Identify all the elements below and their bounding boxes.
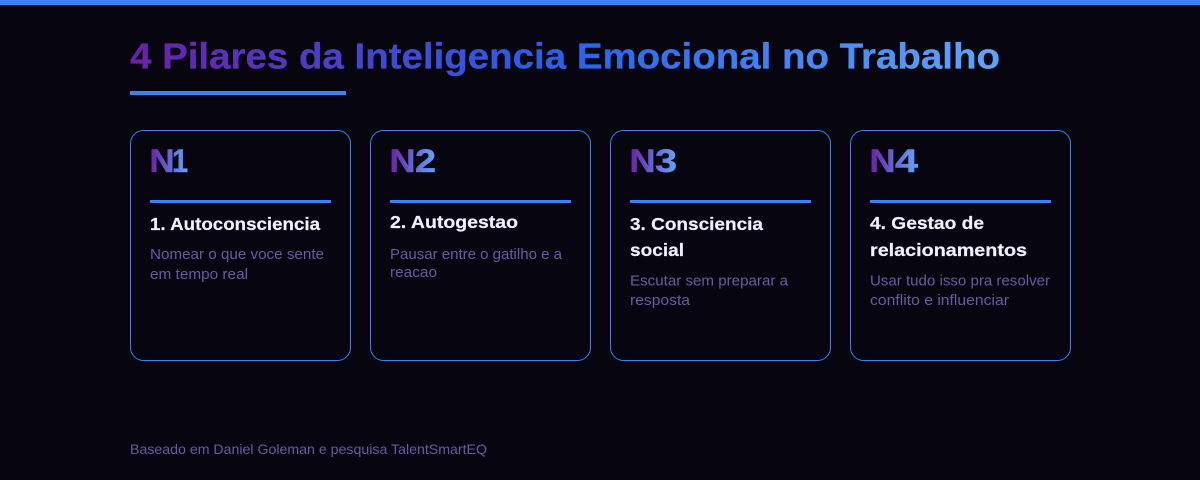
top accent bar — [0, 0, 1200, 5]
card heading: 1. Autoconsciencia — [150, 214, 320, 234]
panel: card N2 — [370, 130, 590, 360]
title: 4 Pilares da Inteligencia Emocional no Trabalho — [130, 36, 1000, 76]
title underline — [130, 91, 346, 95]
card description: resposta — [630, 292, 691, 309]
card description: reacao — [390, 264, 437, 281]
card description: Escutar sem preparar a — [630, 272, 789, 290]
card number N2: N — [390, 143, 416, 179]
card heading: 3. Consciencia — [630, 214, 763, 234]
card description: Usar tudo isso pra resolver — [870, 272, 1050, 290]
panel: card N4 — [850, 130, 1070, 360]
card heading: relacionamentos — [870, 240, 1027, 260]
card description: Pausar entre o gatilho e a — [390, 246, 563, 263]
card description: Nomear o que voce sente — [150, 246, 324, 263]
card heading: social — [630, 240, 684, 260]
card number N3: N — [630, 143, 656, 179]
card number N2: 2 — [415, 143, 436, 179]
card number N1: 1 — [172, 143, 188, 179]
card heading: 4. Gestao de — [870, 213, 984, 233]
card description: conflito e influenciar — [870, 292, 1009, 309]
panel: card N1 — [130, 130, 350, 360]
card heading: 2. Autogestao — [390, 212, 518, 232]
card number N1: N — [150, 143, 174, 179]
card number N4: 4 — [895, 143, 918, 179]
card number N3: 3 — [655, 143, 677, 179]
panel: card N3 — [610, 130, 830, 360]
footer source note: Baseado em Daniel Goleman e pesquisa TalentSmartEQ — [130, 441, 487, 457]
card description: em tempo real — [150, 266, 248, 283]
card number N4: N — [870, 143, 896, 179]
